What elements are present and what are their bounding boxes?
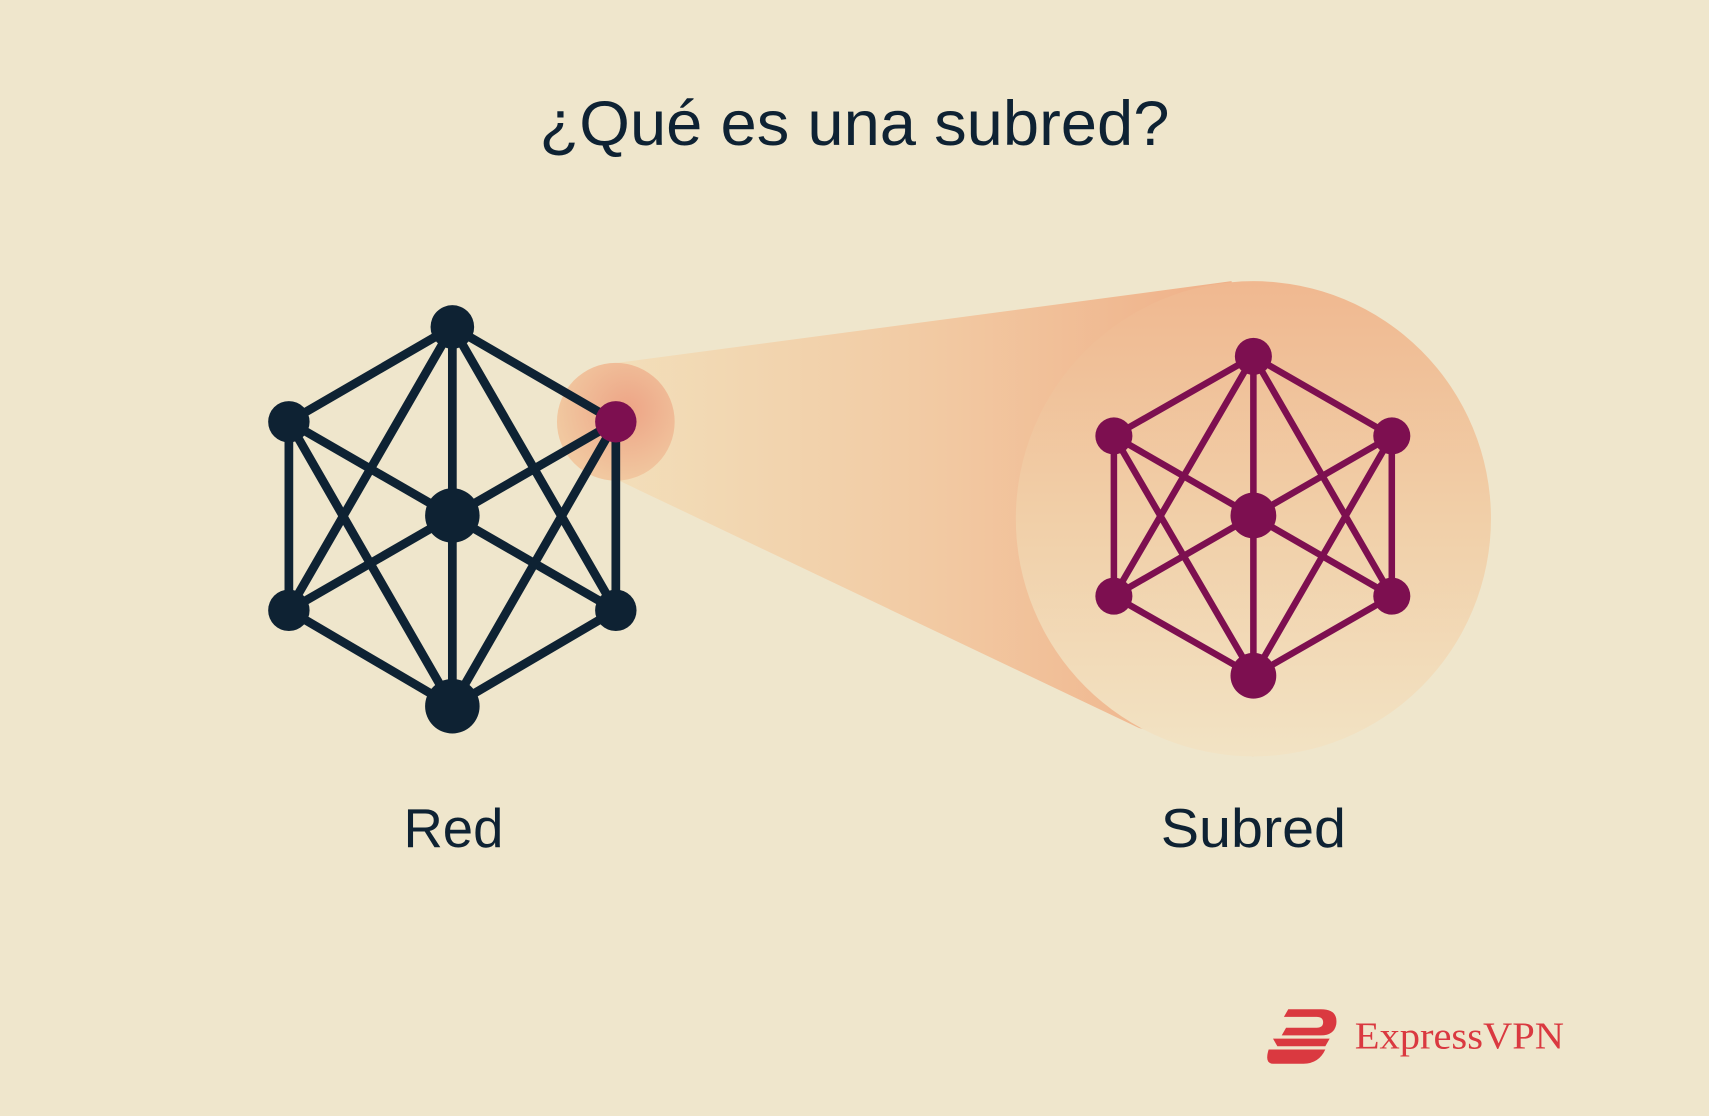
- zoom lens: small circle: [557, 363, 675, 481]
- title: ¿Qué es una subred?: [540, 89, 1169, 159]
- logo: ExpressVPN: [1267, 1009, 1564, 1064]
- network: Red: [268, 305, 637, 733]
- label: Red: Red: [403, 798, 503, 859]
- icon: logo mark: [1267, 1009, 1336, 1064]
- label: Subred: Subred: [1161, 798, 1346, 859]
- logo: ExpressVPN: ExpressVPN: [1355, 1015, 1564, 1057]
- zoom cone: [617, 281, 1491, 756]
- network: Subred: [1095, 338, 1410, 699]
